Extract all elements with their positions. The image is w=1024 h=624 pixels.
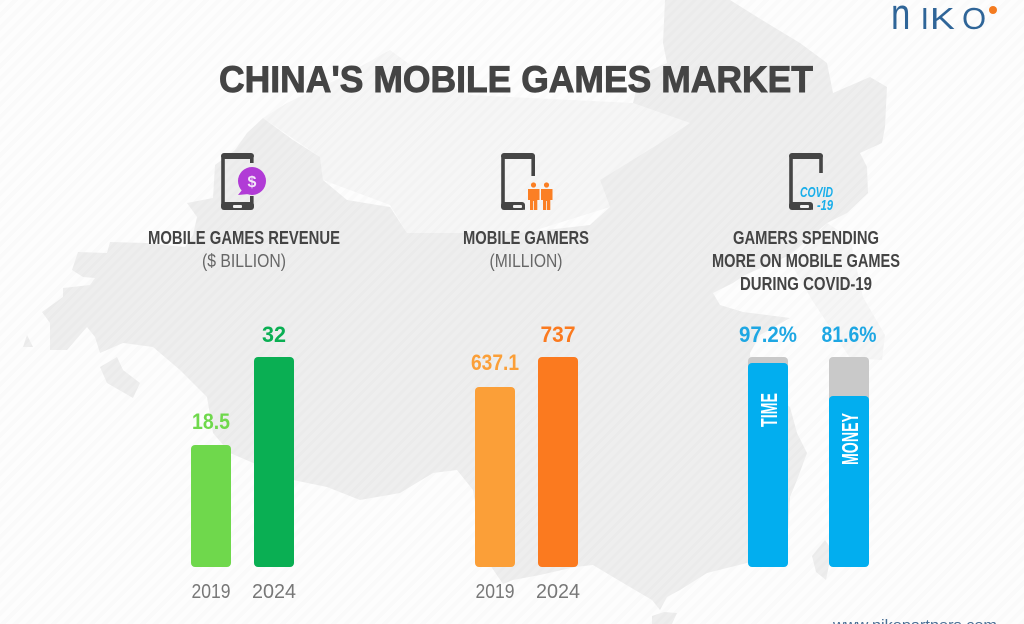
logo: niko [891,0,997,39]
icon: phone with dollar bubble [221,153,266,210]
heading: gamers spending more during COVID-19: DURING COVID-19 [740,274,872,294]
bar chart: gamers: 737 [540,322,576,347]
logo: niko: K [930,2,955,36]
bar chart: COVID-19 spending: 81.6% [822,322,876,347]
icon: phone with dollar bubble: $ [248,174,257,191]
bar chart: revenue: 18.5 [192,409,230,434]
bar chart: COVID-19 spending [739,322,876,567]
bar chart: gamers: 2019 [476,581,514,603]
heading: gamers spending more during COVID-19: GAMERS SPENDING [733,228,879,248]
heading: gamers spending more during COVID-19: MORE ON MOBILE GAMES [712,251,900,271]
logo: niko: I [920,1,929,36]
bar chart: revenue: 2024 [252,581,296,603]
heading: mobile games revenue: ($ BILLION) [202,251,286,271]
map: neighbouring land, lighter [263,50,885,360]
icon: phone with COVID-19 label: COVID [800,184,833,201]
bar chart: revenue: 2019 [192,581,230,603]
icon: phone with two gamers [501,153,552,210]
logo: niko: O [962,1,986,36]
bar chart: COVID-19 spending: TIME [756,393,782,427]
bar chart: gamers: 637.1 [471,350,519,375]
icon: phone with COVID-19 label [789,153,833,214]
icon: phone with COVID-19 label: -19 [817,197,833,214]
heading: mobile games revenue [148,228,340,271]
bar chart: revenue: 32 [262,322,286,347]
bar chart: gamers: 2024 [536,581,580,603]
heading: gamers spending more during COVID-19 [712,228,900,294]
heading: mobile games revenue: MOBILE GAMES REVENUE [148,228,340,248]
bar chart: COVID-19 spending: MONEY [837,413,863,465]
title: CHINA'S MOBILE GAMES MARKET [219,59,813,100]
heading: mobile gamers: (MILLION) [490,251,562,271]
heading: mobile gamers: MOBILE GAMERS [463,228,589,248]
bar chart: gamers [471,322,580,603]
bar chart: revenue [191,322,296,603]
heading: mobile gamers [463,228,589,271]
bar chart: COVID-19 spending: 97.2% [739,322,797,347]
